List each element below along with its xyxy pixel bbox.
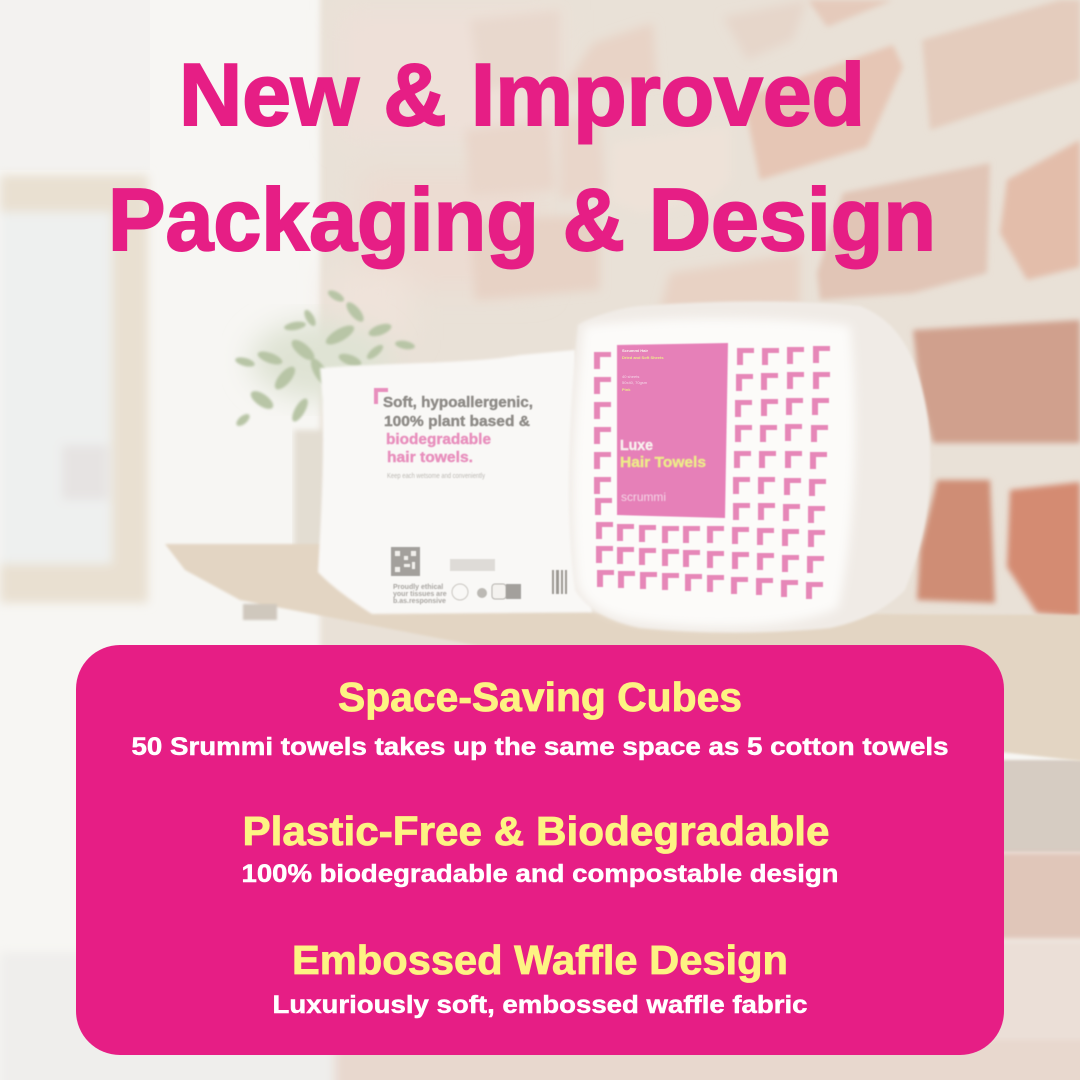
brand pattern: [594, 346, 830, 599]
feature: plastic-free: 100% biodegradable and compostable design: [242, 860, 838, 888]
title: New & Improved: [179, 45, 865, 144]
pink label: Pink: [622, 387, 631, 392]
pink label: Luxe: [620, 437, 653, 454]
pink label: 40 sheets: [622, 374, 639, 379]
feature: space-saving cubes: [132, 674, 948, 761]
pink label: [617, 343, 728, 518]
package text: Soft, hypoallergenic,: [383, 394, 533, 411]
plant: [234, 288, 416, 550]
panel: features: [76, 645, 1004, 1055]
package text: [374, 388, 533, 480]
pink label: Scrummi Hair: [622, 348, 648, 353]
QR code and logos: b.as.responsive: [393, 598, 446, 605]
feature: space-saving cubes: Space-Saving Cubes: [338, 674, 742, 720]
pink label: 50x40, 70gsm: [622, 380, 648, 385]
package text: biodegradable: [386, 431, 491, 448]
QR code and logos: your tissues are: [393, 591, 447, 598]
title: [108, 45, 936, 269]
package text: Keep each wetsome and conveniently: [387, 473, 485, 480]
QR code and logos: Proudly ethical: [393, 584, 443, 591]
feature: space-saving cubes: 50 Srummi towels takes up the same space as 5 cotton towels: [132, 733, 948, 761]
pink label: Dried and Soft Sheets: [622, 355, 664, 360]
product: front towel cube: [569, 302, 930, 632]
feature: embossed waffle: Embossed Waffle Design: [292, 937, 788, 983]
shelf: [165, 544, 1080, 762]
package text: 100% plant based &: [384, 413, 530, 430]
feature: plastic-free: [242, 808, 838, 888]
title: Packaging & Design: [108, 170, 936, 269]
QR code and logos: [391, 547, 567, 605]
feature: embossed waffle: Luxuriously soft, embossed waffle fabric: [272, 991, 808, 1019]
pink label: Hair Towels: [620, 454, 706, 471]
feature: embossed waffle: [272, 937, 808, 1019]
product: back towel package: [318, 350, 592, 614]
feature: plastic-free: Plastic-Free & Biodegradable: [242, 808, 830, 854]
wall mirror frame: [0, 175, 148, 603]
brick wall: [320, 0, 1080, 1080]
pink label: scrummi: [621, 490, 666, 504]
package text: hair towels.: [387, 449, 473, 466]
